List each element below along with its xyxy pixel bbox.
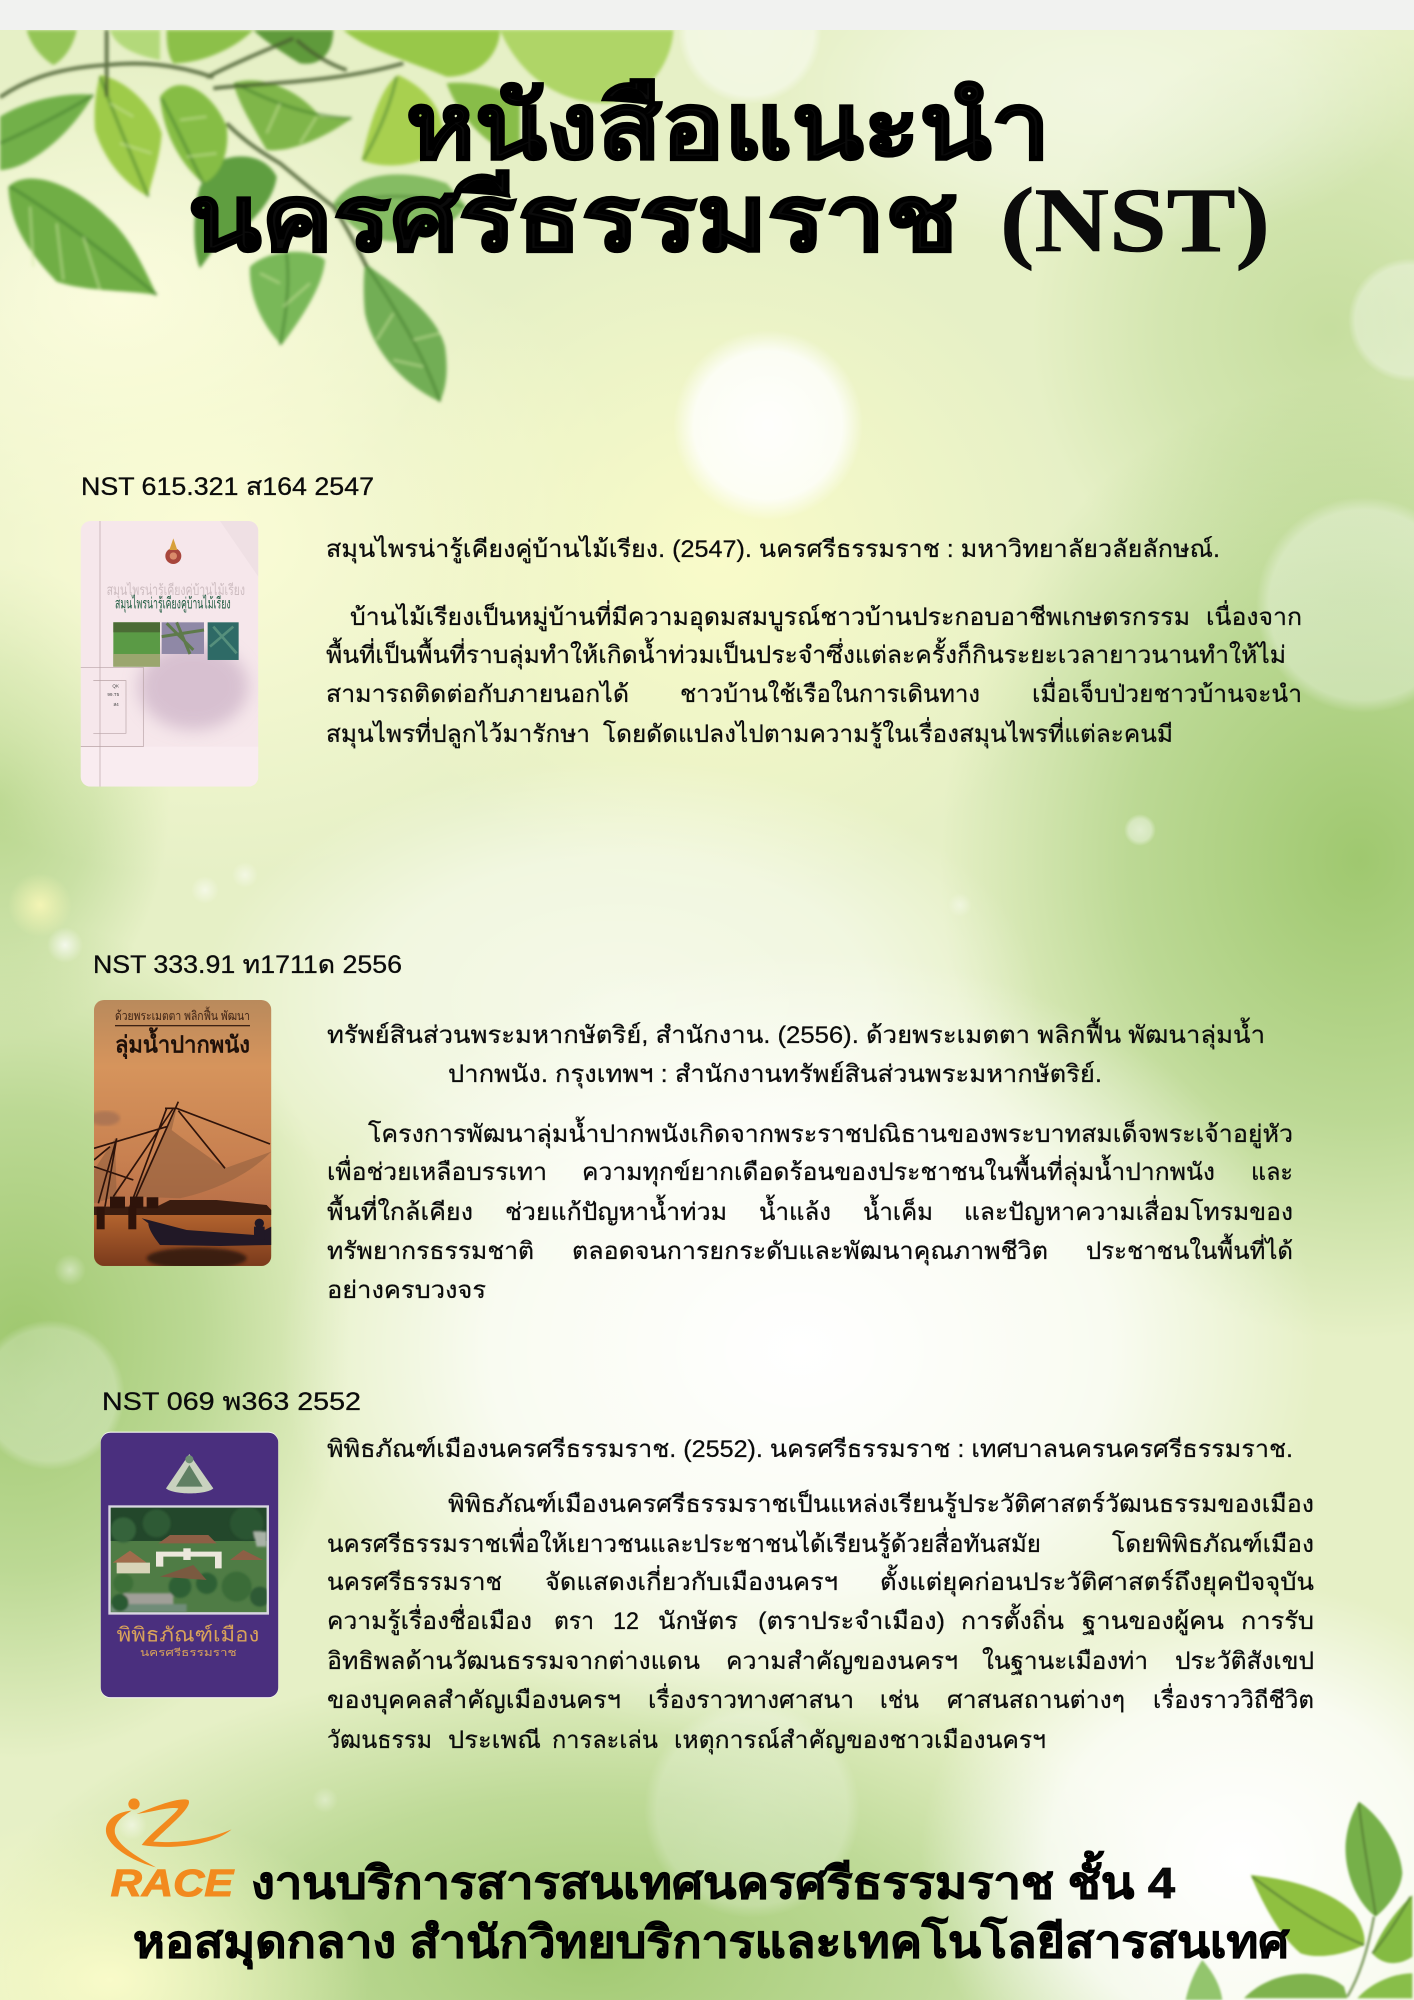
footer text: หอสมุดกลาง สำนักวิทยบริการและเทคโนโลยีสารสนเทศ [133, 1915, 1290, 1970]
book 1 summary: พื้นที่เป็นพื้นที่ราบลุ่มทำให้เกิดน้ำท่วมเป็นประจำซึ่งแต่ละครั้งก็กินระยะเวลายาวนานทำให้ไม่ [326, 637, 1286, 670]
book 1 cover: สมุนไพรน่ารู้เคียงคู่บ้านไม้เรียง [115, 594, 231, 613]
book 2 summary: ประชาชนในพื้นที่ได้ [1086, 1233, 1293, 1265]
book 1 summary: ชาวบ้านใช้เรือในการเดินทาง [680, 680, 980, 708]
book 3 summary: ประวัติสังเขป [1175, 1648, 1314, 1675]
book 1 summary: เมื่อเจ็บป่วยชาวบ้านจะนำ [1032, 677, 1302, 708]
book 3 summary: เช่น [880, 1687, 919, 1714]
book 2 summary: เพื่อช่วยเหลือบรรเทา [327, 1155, 547, 1186]
book 1 call number: NST 615.321 ส164 2547 [81, 473, 374, 501]
book 1 cover [81, 521, 258, 787]
book 1 summary: สามารถติดต่อกับภายนอกได้ [326, 680, 629, 708]
book 3 summary: การตั้งถิ่น [961, 1603, 1064, 1635]
book 3 summary: ศาสนสถานต่างๆ [947, 1687, 1125, 1714]
book 3 summary: นครศรีธรรมราชเพื่อให้เยาวชนและประชาชนได้เรียนรู้ด้วยสื่อทันสมัย [327, 1527, 1041, 1559]
book 1 cover: ส4 [113, 702, 119, 707]
book 2 cover [90, 1000, 271, 1269]
RACE logo [106, 1798, 235, 1905]
book 3 summary: ของบุคคลสำคัญเมืองนครฯ [327, 1687, 621, 1715]
book 3 summary: นครศรีธรรมราช [327, 1569, 502, 1596]
book 3 summary: วัฒนธรรม [327, 1727, 432, 1754]
book 2 summary: และปัญหาความเสื่อมโทรมของ [964, 1195, 1293, 1226]
book 3 summary: อิทธิพลด้านวัฒนธรรมจากต่างแดน [327, 1648, 700, 1675]
book 2 summary: ตลอดจนการยกระดับและพัฒนาคุณภาพชีวิต [572, 1238, 1048, 1266]
top strip [0, 0, 1414, 30]
book 2 cover: ด้วยพระเมตตา พลิกฟื้น พัฒนา [115, 1006, 250, 1023]
book 2 citation: ปากพนัง. กรุงเทพฯ : สำนักงานทรัพย์สินส่วนพระมหากษัตริย์. [448, 1060, 1102, 1089]
book 2 summary: ช่วยแก้ปัญหาน้ำท่วม [505, 1194, 727, 1226]
book 3 summary: 12 [613, 1608, 639, 1635]
book 3 summary: ประเพณี [448, 1727, 541, 1754]
book 3 call number: NST 069 พ363 2552 [102, 1388, 361, 1416]
book 3 summary: โดยพิพิธภัณฑ์เมือง [1112, 1530, 1314, 1558]
book 2 summary: น้ำเค็ม [863, 1194, 933, 1226]
book 3 summary: เรื่องราวทางศาสนา [648, 1683, 854, 1714]
book 2 citation: ทรัพย์สินส่วนพระมหากษัตริย์, สำนักงาน. (2556). ด้วยพระเมตตา พลิกฟื้น พัฒนาลุ่มน้ำ [327, 1017, 1265, 1050]
book 3 cover: นครศรีธรรมราช [140, 1647, 237, 1659]
decorative leaves: top left [0, 30, 673, 402]
book 2 summary: ทรัพยากรธรรมชาติ [327, 1238, 534, 1265]
book 3 summary [327, 1489, 1314, 1755]
book 2 summary: อย่างครบวงจร [327, 1277, 486, 1304]
book 2 summary: น้ำแล้ง [759, 1194, 831, 1226]
book 2 citation [327, 1017, 1265, 1089]
book 3 cover [101, 1432, 278, 1698]
book 3 summary: ความสำคัญของนครฯ [726, 1648, 958, 1675]
book 1 citation: สมุนไพรน่ารู้เคียงคู่บ้านไม้เรียง. (2547). นครศรีธรรมราช : มหาวิทยาลัยวลัยลักษณ์. [326, 535, 1220, 564]
decorative leaves: bottom right [1186, 1802, 1412, 2000]
book 3 summary: เรื่องราววิถีชีวิต [1153, 1683, 1314, 1714]
title: หนังสือแนะนำ [406, 76, 1050, 178]
book 2 summary: ความทุกข์ยากเดือดร้อนของประชาชนในพื้นที่ลุ่มน้ำปากพนัง [582, 1154, 1215, 1187]
book 3 summary: ฐานของผู้คน [1082, 1608, 1224, 1636]
book 1 summary: สมุนไพรที่ปลูกไว้มารักษา [326, 717, 590, 749]
footer text [133, 1850, 1290, 1970]
book 1 cover: สมุนไพรน่ารู้เคียงคู่บ้านไม้เรียง [107, 581, 245, 599]
book 3 summary: ในฐานะเมืองท่า [982, 1647, 1148, 1675]
title: นครศรีธรรมราช [188, 168, 958, 270]
book 3 summary: ตรา [554, 1608, 594, 1635]
book 1 summary [326, 600, 1302, 749]
book 2 summary: และ [1251, 1159, 1293, 1186]
book 3 summary: พิพิธภัณฑ์เมืองนครศรีธรรมราชเป็นแหล่งเรียนรู้ประวัติศาสตร์วัฒนธรรมของเมือง [448, 1489, 1314, 1519]
book 2 call number: NST 333.91 ท1711ด 2556 [93, 951, 402, 979]
book 3 summary: ความรู้เรื่องชื่อเมือง [327, 1604, 532, 1636]
title [188, 76, 1270, 271]
book 3 summary: นักษัตร [658, 1608, 738, 1635]
book 3 summary: (ตราประจำเมือง) [758, 1608, 945, 1635]
book 3 summary: การละเล่น [552, 1727, 658, 1754]
book 3 summary: จัดแสดงเกี่ยวกับเมืองนครฯ [545, 1565, 838, 1596]
book 1 summary: เนื่องจาก [1206, 600, 1302, 631]
book 3 summary: ตั้งแต่ยุคก่อนประวัติศาสตร์ถึงยุคปัจจุบัน [880, 1564, 1314, 1597]
book 2 summary: พื้นที่ใกล้เคียง [327, 1194, 473, 1226]
RACE logo: RACE [111, 1862, 235, 1905]
book 1 cover: 99.T5 [107, 692, 120, 697]
title: (NST) [1000, 169, 1270, 271]
book 2 cover: ลุ่มน้ำปากพนัง [115, 1027, 250, 1060]
book 2 summary [327, 1116, 1293, 1304]
book 1 cover: QK [112, 683, 120, 688]
book 3 cover: พิพิธภัณฑ์เมือง [117, 1624, 259, 1647]
book 3 summary: การรับ [1241, 1608, 1314, 1635]
book 3 citation: พิพิธภัณฑ์เมืองนครศรีธรรมราช. (2552). นครศรีธรรมราช : เทศบาลนครนครศรีธรรมราช. [327, 1435, 1293, 1463]
book 2 summary: โครงการพัฒนาลุ่มน้ำปากพนังเกิดจากพระราชปณิธานของพระบาทสมเด็จพระเจ้าอยู่หัว [368, 1116, 1293, 1149]
book 1 summary: บ้านไม้เรียงเป็นหมู่บ้านที่มีความอุดมสมบูรณ์ชาวบ้านประกอบอาชีพเกษตรกรรม [350, 600, 1190, 632]
book 3 summary: เหตุการณ์สำคัญของชาวเมืองนครฯ [674, 1726, 1046, 1755]
book 1 summary: โดยดัดแปลงไปตามความรู้ในเรื่องสมุนไพรที่แต่ละคนมี [603, 717, 1173, 749]
footer text: งานบริการสารสนเทศนครศรีธรรมราช ชั้น 4 [251, 1850, 1176, 1908]
